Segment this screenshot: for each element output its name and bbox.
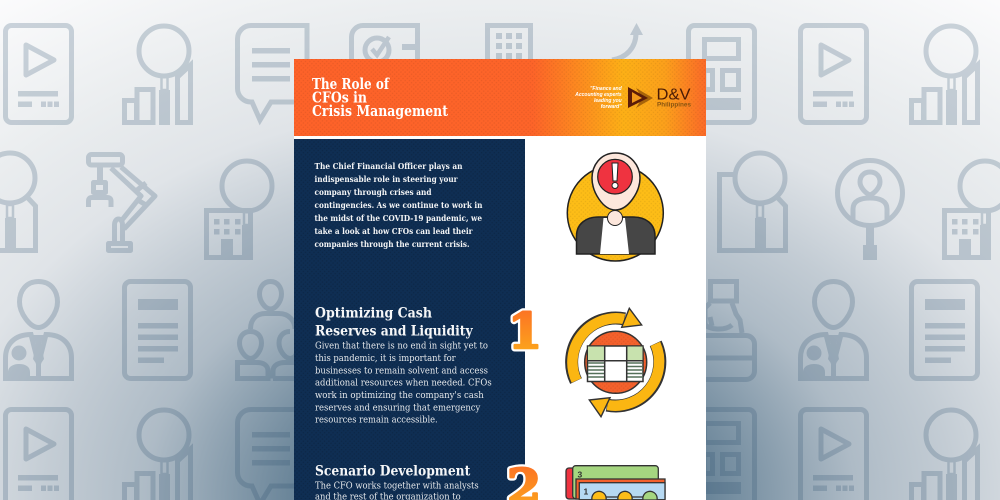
section 2 body: [315, 480, 479, 500]
intro paragraph: [314, 162, 483, 250]
title: CFOs in: [312, 90, 367, 106]
panel: header: [294, 59, 706, 136]
tagline: leading you: [594, 98, 622, 104]
section 1 heading: [315, 306, 473, 340]
section 1 body: Given that there is no end in sight yet to: [315, 341, 488, 352]
icon: play document, row 1 left: [6, 26, 72, 122]
icon: check document, row 1: [352, 26, 420, 83]
title: The Role of: [312, 76, 390, 93]
title: Crisis Management: [312, 103, 448, 120]
section 2 body: The CFO works together with analysts: [315, 480, 479, 491]
intro paragraph: company through crises and: [314, 188, 432, 198]
icon: magnifier building, row 2: [206, 161, 272, 260]
icon: magnifier document, row 2 left: [0, 153, 36, 253]
intro paragraph: contingencies. As we continue to work in: [314, 201, 483, 211]
icon: scenario cards: 3: [578, 470, 582, 480]
icon: speech bubble, row 4: [238, 410, 307, 500]
section 1 body: additional resources when needed. CFOs: [315, 378, 492, 389]
title: [312, 76, 448, 120]
icon: magnifier document, row 2 right: [720, 153, 786, 253]
icon: layout document, row 1: [688, 26, 754, 122]
section 1 heading: Reserves and Liquidity: [315, 324, 473, 340]
logo: D&amp;V Philippines: [628, 86, 691, 108]
icon: magnifier chart, row 1 right: [912, 26, 978, 125]
icon: robot arm, row 2: [88, 154, 155, 250]
section 1 heading: Optimizing Cash: [315, 306, 432, 322]
icon: hand and stack, row 3 right: [690, 282, 755, 380]
section 1 body: reserves and ensuring that emergency: [315, 402, 481, 413]
icon: play document, row 1 right: [800, 26, 866, 122]
section 1 body: [315, 341, 492, 426]
infographic card: [294, 59, 706, 500]
icon: scenario cards: [566, 466, 665, 500]
icon: document, row 3 right: [912, 282, 978, 378]
section 2 heading: Scenario Development: [315, 463, 471, 479]
icon: speech bubble, row 1: [238, 26, 307, 120]
icon: magnifier person, row 2: [838, 160, 902, 260]
icon: cash cycle: [572, 308, 660, 417]
icon: building, row 1: [488, 26, 530, 86]
tagline: "Finance and: [590, 86, 622, 92]
icon: magnifier chart, row 4: [124, 410, 190, 500]
intro paragraph: companies through the current crisis.: [314, 240, 470, 250]
intro paragraph: indispensable role in steering your: [314, 175, 458, 185]
icon: document, row 3: [124, 282, 190, 378]
tagline: Accounting experts: [574, 92, 622, 98]
intro paragraph: the midst of the COVID-19 pandemic, we: [314, 214, 482, 224]
tagline: forward": [601, 104, 622, 110]
section 1 body: work in optimizing the company's cash: [315, 390, 484, 401]
intro paragraph: take a look at how CFOs can lead their: [314, 227, 473, 237]
number 1: 1: [508, 302, 542, 360]
icon: play document, row 4 right: [800, 410, 866, 500]
intro paragraph: The Chief Financial Officer plays an: [314, 162, 463, 172]
section 1 body: businesses to remain solvent and access: [315, 365, 488, 376]
number 1: 1: [508, 302, 542, 360]
icon: magnifier chart, row 4 right: [912, 410, 978, 500]
icon: person, row 3 right: [800, 282, 866, 381]
icon: executive with alert: [567, 153, 663, 261]
logo: D&amp;V Philippines: D&V: [656, 86, 691, 104]
icon: magnifier building, row 2 right: [944, 161, 1000, 260]
panel: navy text column: [294, 139, 525, 500]
logo: D&amp;V Philippines: Philippines: [657, 102, 691, 108]
icon: person, row 3 left: [6, 282, 72, 381]
section 1 body: this pandemic, it is important for: [315, 353, 456, 364]
icon: magnifier chart, row 1: [124, 26, 190, 125]
icon: growth arrow, row 1: [612, 23, 643, 60]
icon: layout document, row 4: [688, 410, 754, 500]
icon: group of people, row 3: [238, 282, 297, 378]
tagline: [574, 86, 622, 110]
icon: play document, row 4 left: [6, 410, 72, 500]
icon: scenario cards: 1: [584, 486, 588, 496]
section 1 body: resources remain accessible.: [315, 415, 438, 426]
